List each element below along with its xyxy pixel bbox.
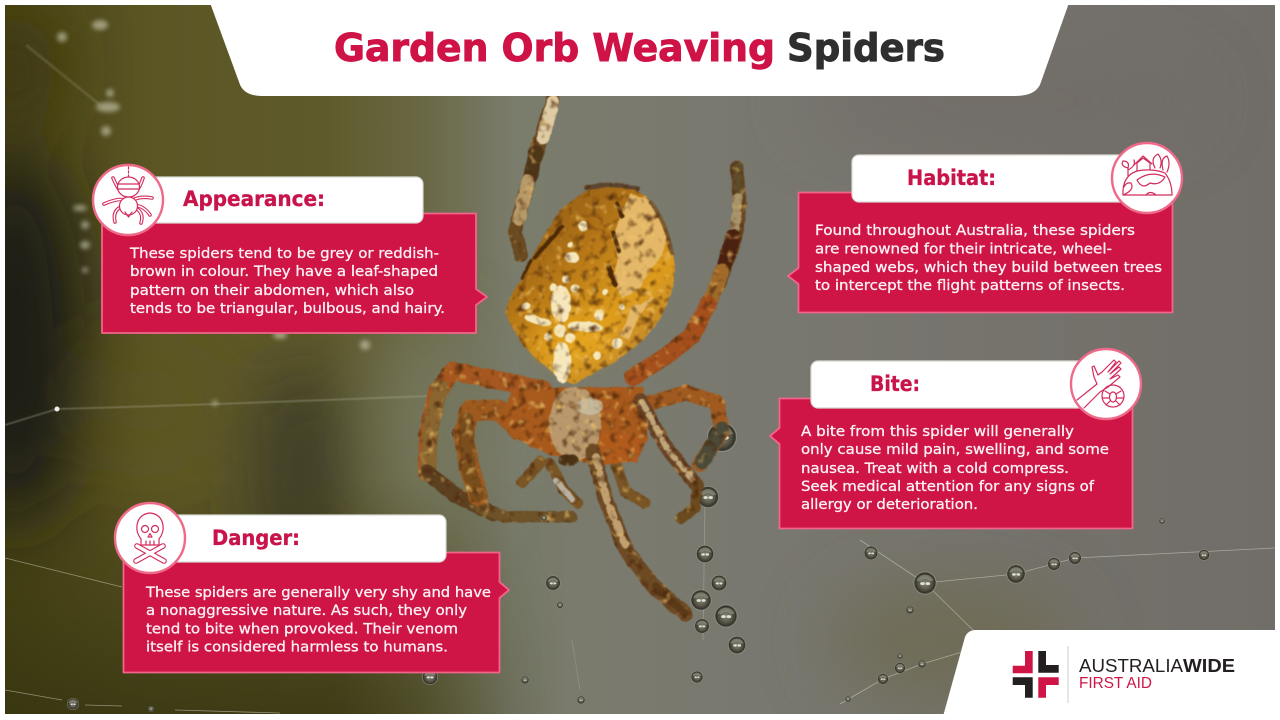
appearance heading: Appearance:	[183, 187, 325, 211]
panel: habitat	[788, 143, 1182, 312]
spider	[427, 100, 740, 614]
logo tagline: FIRST AID	[1079, 675, 1152, 692]
icon: bitten hand	[1071, 349, 1141, 419]
appearance text: These spiders tend to be grey or reddish-	[129, 246, 439, 262]
danger text: These spiders are generally very shy and have	[145, 585, 491, 601]
icon: skull and crossbones	[115, 503, 185, 573]
danger heading bar	[170, 515, 446, 562]
habitat text: to intercept the flight patterns of insects.	[815, 278, 1125, 294]
logo wordmark: WIDE	[1183, 655, 1235, 676]
panel: danger	[115, 503, 509, 672]
panel: bite	[770, 349, 1141, 528]
droplets behind spider legs	[451, 422, 737, 508]
appearance heading bar	[150, 177, 423, 223]
bite text: nausea. Treat with a cold compress.	[801, 461, 1069, 477]
logo mark	[1013, 651, 1059, 698]
bite text: allergy or deterioration.	[801, 497, 978, 513]
front legs	[593, 400, 697, 614]
icon: habitat	[1112, 143, 1182, 213]
bite text: A bite from this spider will generally	[801, 424, 1074, 440]
danger text: itself is considered harmless to humans.	[146, 640, 448, 656]
bite heading: Bite:	[870, 372, 920, 396]
habitat text: shaped webs, which they build between trees	[815, 260, 1162, 276]
abdomen	[506, 184, 675, 384]
appearance text	[129, 246, 445, 317]
cephalothorax	[498, 386, 648, 465]
logo	[1013, 646, 1235, 703]
appearance text: pattern on their abdomen, which also	[130, 283, 414, 299]
title panel	[209, 0, 1070, 96]
habitat text	[815, 223, 1162, 294]
danger text	[145, 585, 491, 656]
panel: appearance	[93, 165, 487, 333]
bite text: Seek medical attention for any signs of	[801, 479, 1095, 495]
danger text: a nonaggressive nature. As such, they only	[146, 603, 467, 619]
bite text	[801, 424, 1109, 513]
habitat text: are renowned for their intricate, wheel-	[815, 242, 1112, 258]
danger text: tend to bite when provoked. Their venom	[146, 622, 458, 638]
habitat heading: Habitat:	[907, 166, 996, 190]
title: Spiders	[787, 26, 945, 70]
bite heading bar	[811, 361, 1101, 408]
icon: spider	[93, 165, 163, 235]
far legs	[427, 100, 740, 517]
bite text: only cause mild pain, swelling, and some	[801, 442, 1109, 458]
danger heading: Danger:	[212, 526, 300, 550]
appearance text: brown in colour. They have a leaf-shaped	[130, 264, 438, 280]
appearance text: tends to be triangular, bulbous, and hairy.	[130, 301, 445, 317]
logo panel	[942, 630, 1280, 720]
habitat text: Found throughout Australia, these spiders	[815, 223, 1135, 239]
title: Garden Orb Weaving	[334, 26, 775, 70]
habitat heading bar	[852, 155, 1140, 202]
water droplets	[67, 515, 1210, 712]
logo wordmark: AUSTRALIA	[1079, 655, 1184, 676]
